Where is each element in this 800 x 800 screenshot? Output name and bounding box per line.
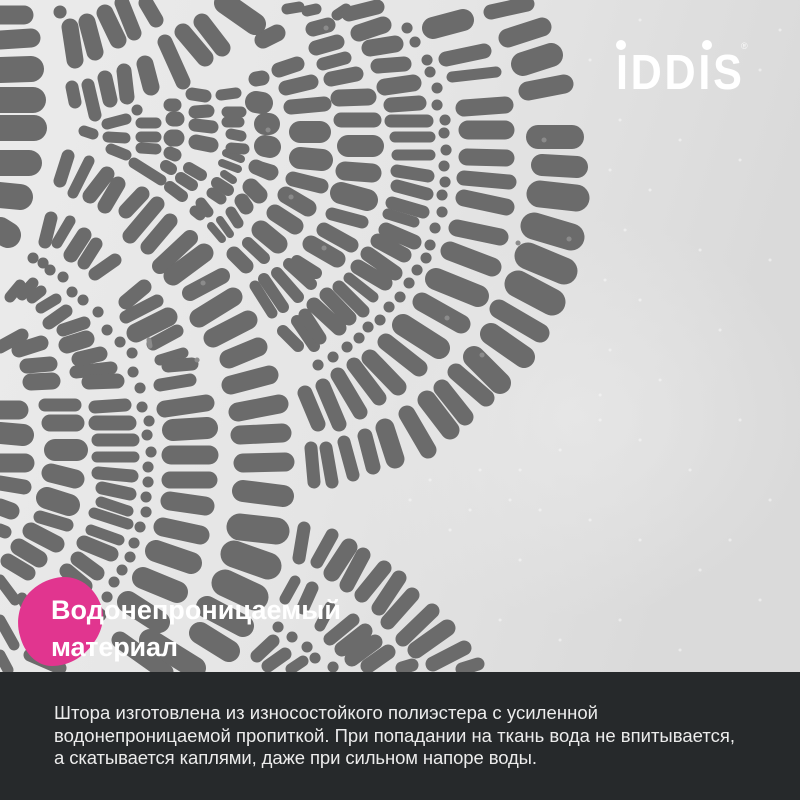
upper left and left edge petals bbox=[0, 3, 255, 235]
description text: водонепроницаемой пропиткой. При попадании на ткань вода не впитывается, bbox=[54, 725, 735, 746]
registered mark: ® bbox=[741, 41, 748, 51]
footer band bbox=[0, 672, 800, 800]
lower rosette petals bbox=[0, 156, 285, 672]
title: материал bbox=[51, 632, 178, 662]
description text: а скатывается каплями, даже при сильном напоре воды. bbox=[54, 747, 537, 768]
logo wordmark: IDDIS bbox=[616, 44, 742, 100]
logo dots bbox=[616, 40, 712, 50]
description text bbox=[54, 702, 735, 768]
main rosette petals bbox=[84, 4, 577, 482]
rosette pattern bbox=[0, 3, 577, 672]
logo bbox=[616, 40, 748, 100]
water droplets bbox=[149, 20, 780, 650]
title bbox=[51, 595, 341, 662]
description text: Штора изготовлена из износостойкого полиэстера с усиленной bbox=[54, 702, 598, 723]
title: Водонепроницаемый bbox=[51, 595, 341, 625]
pink blob bbox=[18, 577, 103, 666]
bottom rosette petals bbox=[257, 528, 478, 669]
